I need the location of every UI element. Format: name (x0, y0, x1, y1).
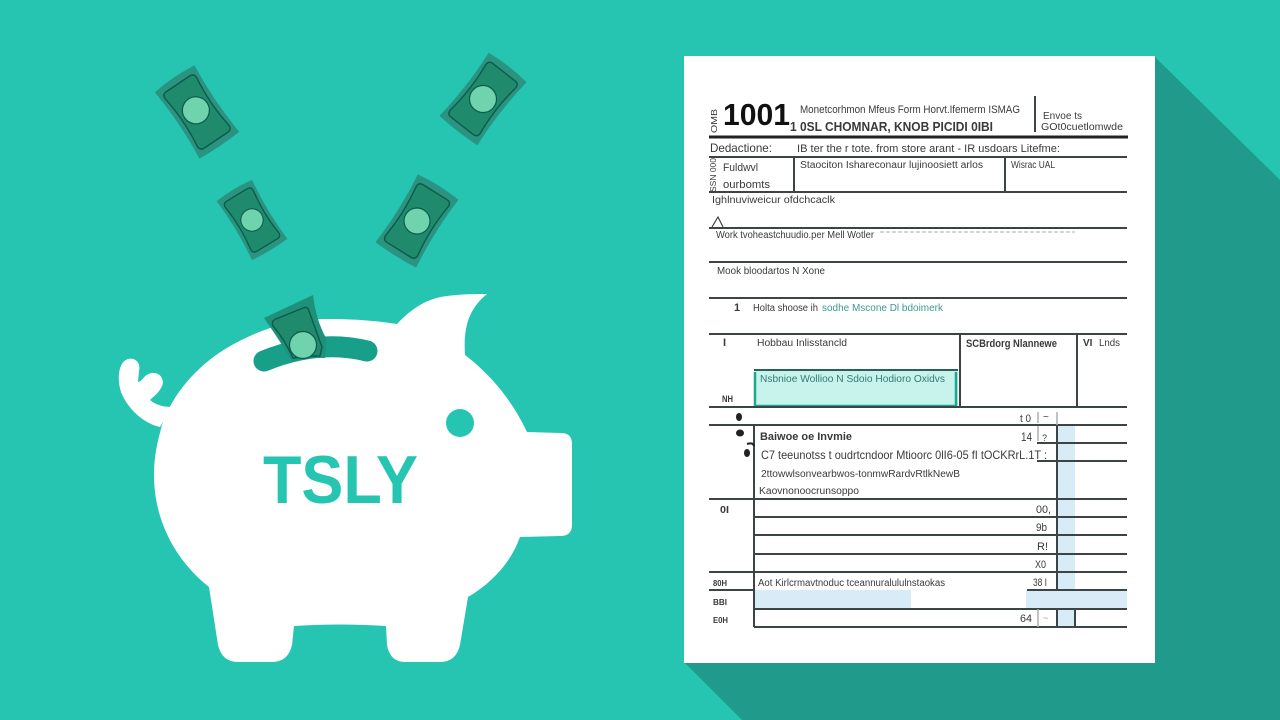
form upper text rows: Fuldwvl (723, 162, 758, 174)
form header: Monetcorhmon Mfeus Form Horvt.Ifemerm ISMAG (800, 104, 1020, 116)
form income section: Kaovnonoocrunsoppo (759, 486, 859, 497)
form income section: 2ttowwlsonvearbwos-tonmwRardvRtlkNewB (761, 469, 960, 480)
TSLY label: TSLY (263, 442, 418, 518)
form upper text rows (709, 141, 1060, 314)
form ruled lines (709, 96, 1128, 627)
form upper text rows: Holta shoose ih (753, 303, 818, 314)
form income section: ~ (1043, 412, 1049, 423)
tax form (684, 56, 1155, 663)
pig body (154, 294, 572, 662)
form table headings: Hobbau Inlisstancld (757, 338, 847, 349)
form upper text rows: Ighlnuviweicur ofdchcaclk (712, 195, 836, 206)
triangle mark (712, 217, 723, 227)
form numbered rows: 9b (1036, 522, 1047, 534)
form header: GOt0cuetlomwde (1041, 122, 1123, 133)
form header: 1001 (723, 97, 790, 132)
form numbered rows: ~ (1043, 613, 1048, 623)
form numbered rows: Aot Kirlcrmavtnoduc tceannuralululnstaokas (758, 578, 945, 589)
bill entering slot (264, 295, 326, 361)
form table headings: SCBrdorg Nlannewe (966, 338, 1057, 350)
pig eye (446, 409, 474, 437)
form income section: Baiwoe oe Invmie (760, 431, 852, 443)
form upper text rows: 1 (734, 302, 740, 314)
form numbered rows: BBI (713, 598, 727, 607)
form upper text rows: Staociton Ishareconaur lujinoosiett arlos (800, 160, 983, 171)
highlighted teal field (754, 370, 958, 407)
form income section: ? (1042, 433, 1047, 443)
form income section: C7 teeunotss t oudrtcndoor Mtioorc 0lI6-05 fI tOCKRrL.1T : (761, 448, 1047, 462)
form upper text rows: sodhe Mscone Dl bdoimerk (822, 303, 944, 314)
form numbered rows: 64 (1020, 613, 1032, 625)
form numbered rows: X0 (1035, 559, 1046, 571)
pig tail (119, 359, 172, 427)
form paper (684, 56, 1155, 663)
form upper text rows: Work tvoheastchuudio.per Mell Wotler (716, 230, 875, 241)
form table headings: I (723, 337, 726, 349)
coin slot (264, 347, 367, 361)
form table headings: NH (722, 394, 733, 404)
falling bill: top left (154, 64, 240, 159)
form header: 1 0SL CHOMNAR, KNOB PICIDI 0IBI (790, 119, 993, 134)
form upper text rows: Wisrac UAL (1011, 160, 1055, 171)
falling bill: top right (439, 52, 527, 146)
form income section: t 0 (1020, 413, 1031, 425)
form numbered rows: E0H (713, 616, 728, 625)
falling bill: middle left (216, 179, 288, 261)
form shaded fields (755, 425, 1127, 627)
piggy bank (119, 294, 572, 662)
form upper text rows: Mook bloodartos N Xone (717, 266, 825, 277)
form numbered rows: 80H (713, 579, 727, 588)
form table headings: Lnds (1099, 338, 1120, 349)
paper long shadow (685, 57, 1280, 720)
form upper text rows: ourbomts (723, 179, 771, 191)
highlighted teal field: Nsbnioe Wollioo N Sdoio Hodioro Oxidvs (760, 374, 945, 385)
form header: OMB (710, 109, 719, 133)
form numbered rows: 00, (1036, 504, 1051, 516)
form header: Envoe ts (1043, 111, 1082, 122)
form upper text rows: IB ter the r tote. from store arant - IR usdoars Litefme: (797, 143, 1060, 155)
form upper text rows: SSN 000 (709, 157, 718, 192)
bullet marks (736, 413, 754, 457)
form numbered rows: 38 I (1033, 577, 1047, 589)
form table headings: VI (1083, 338, 1093, 349)
form numbered rows: 0I (720, 505, 729, 516)
form upper text rows: Dedactione: (710, 141, 772, 155)
form numbered rows (713, 504, 1051, 625)
form income section: 14 (1021, 430, 1032, 444)
falling bill: middle right (375, 173, 459, 268)
form header (710, 97, 1123, 134)
form income section (759, 412, 1049, 497)
form numbered rows: R! (1037, 541, 1048, 553)
form table headings (722, 337, 1120, 404)
